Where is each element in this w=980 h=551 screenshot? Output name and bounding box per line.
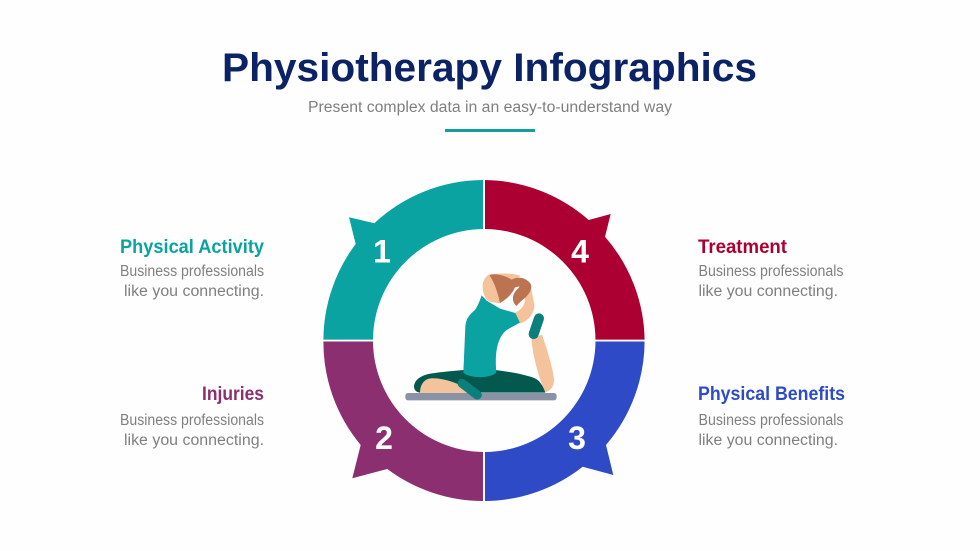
- text block: Physical Benefits: [698, 384, 845, 449]
- text block: Physical Activity: [120, 237, 264, 300]
- text block: Treatment: like you connecting.: [698, 283, 838, 300]
- text block: Injuries: Business professionals: [120, 412, 264, 429]
- text block: Physical Activity: like you connecting.: [124, 283, 264, 300]
- text block: Physical Benefits: like you connecting.: [698, 432, 838, 449]
- segment 4: crimson: [485, 180, 645, 340]
- text block: Injuries: like you connecting.: [124, 432, 264, 449]
- exercise mat: [405, 393, 557, 400]
- crossed leg: [420, 378, 469, 393]
- text block: Injuries: [120, 384, 264, 449]
- subtitle: Present complex data in an easy-to-understand way: [308, 99, 672, 116]
- text block: Injuries: Injuries: [202, 384, 264, 405]
- segment 3: blue: [485, 342, 645, 501]
- icon: woman in yoga pose on mat: [405, 274, 557, 400]
- panel: circular diagram: [323, 180, 645, 501]
- segment 1: teal: [323, 180, 483, 340]
- arm reaching behind head: [515, 289, 534, 323]
- segment 1: teal: 1: [373, 234, 391, 270]
- title underline accent: [445, 129, 535, 132]
- sock on raised foot: [534, 318, 539, 334]
- text block: Treatment: Business professionals: [698, 263, 844, 280]
- text block: Treatment: [698, 237, 844, 300]
- trousers: [414, 370, 545, 393]
- sock on crossed foot: [462, 383, 477, 395]
- segment 2: purple: 2: [375, 420, 393, 456]
- text block: Physical Activity: Physical Activity: [120, 237, 264, 258]
- segment 2: purple: [323, 342, 483, 501]
- head: [483, 275, 503, 303]
- segment 4: crimson: 4: [571, 234, 589, 270]
- text block: Physical Benefits: Physical Benefits: [698, 384, 845, 405]
- raised leg: [531, 335, 554, 393]
- title: Physiotherapy Infographics: [222, 46, 757, 90]
- teal top: [463, 295, 520, 377]
- hair with ponytail: [489, 274, 531, 306]
- text block: Treatment: Treatment: [698, 237, 788, 258]
- segment 3: blue: 3: [568, 420, 586, 456]
- text block: Physical Benefits: Business professionals: [698, 412, 844, 429]
- text block: Physical Activity: Business professionals: [120, 263, 264, 280]
- forehead arm band: [489, 274, 521, 281]
